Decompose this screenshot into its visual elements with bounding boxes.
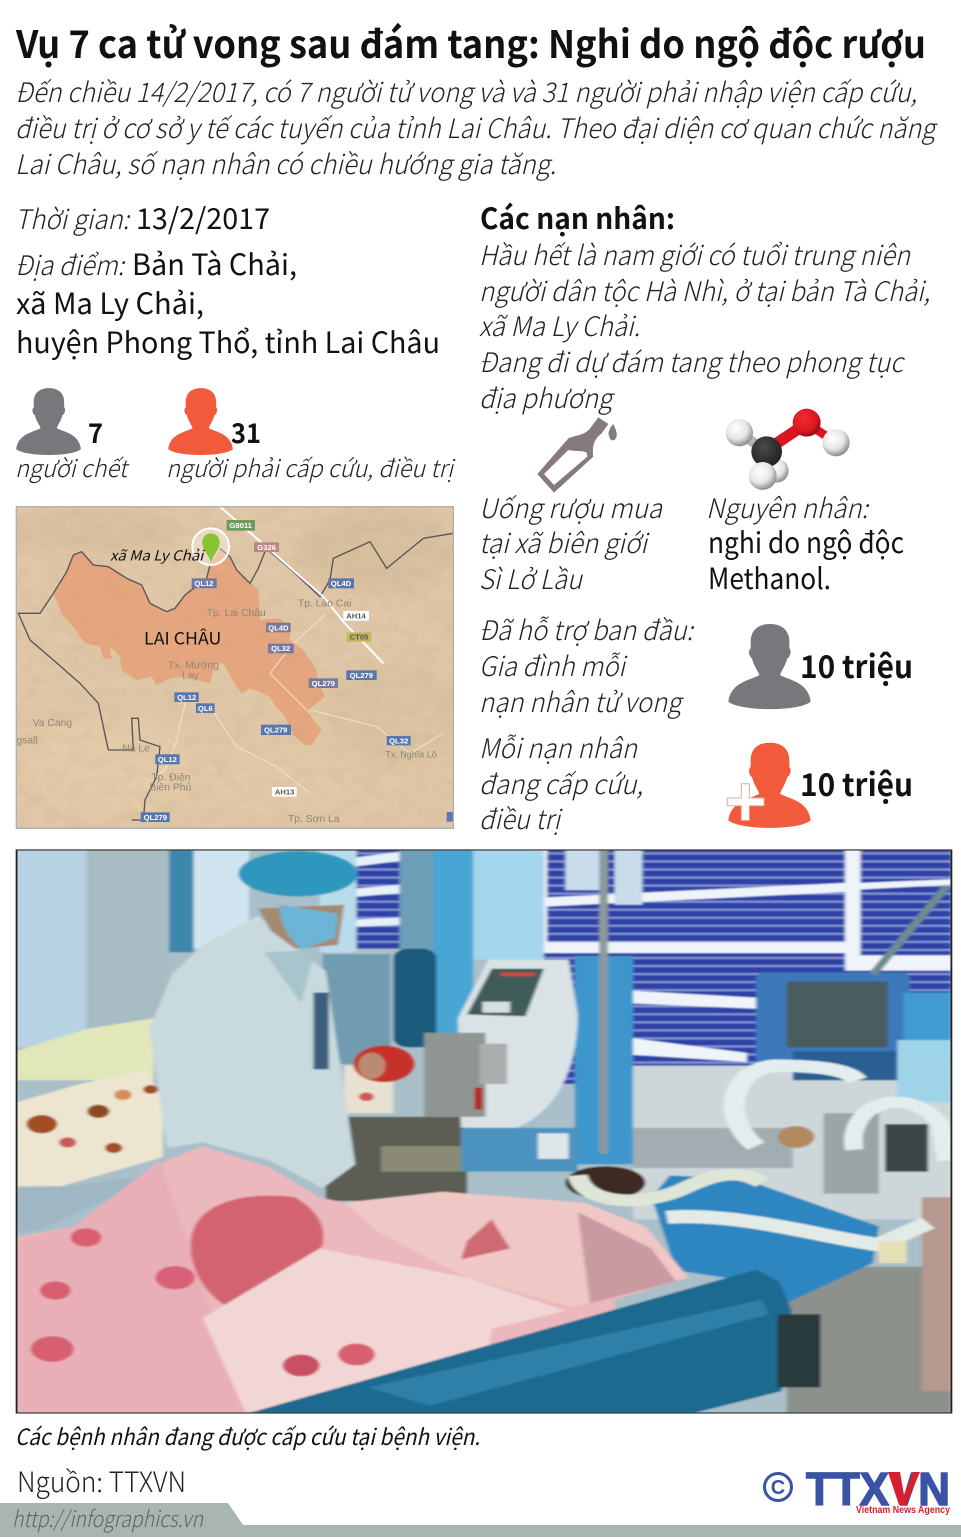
road labels: QL32 xyxy=(271,644,290,653)
road labels: AH14 xyxy=(346,612,367,621)
doctor coat xyxy=(149,916,355,1188)
amount for treated victims: 10 triệu xyxy=(800,760,913,805)
title: Vụ 7 ca tử vong sau đám tang: Nghi do ngộ độc rượu xyxy=(15,14,926,69)
footer band xyxy=(0,1503,961,1537)
road labels: QL4D xyxy=(268,623,289,632)
cause text: nghi do ngộ độc xyxy=(708,520,904,562)
time and place block: Thời gian: xyxy=(15,198,131,237)
icon: wine bottle xyxy=(537,417,617,493)
road labels: QL279 xyxy=(144,813,167,822)
TTXVN logo: TTXVN xyxy=(806,1463,950,1515)
map of Lai Chau xyxy=(10,507,460,828)
blanket xyxy=(18,1146,682,1346)
map place names: Tp. Lai Châu xyxy=(207,608,266,619)
cause text: Nguyên nhân: xyxy=(706,487,870,526)
hospitalised label: người phải cấp cứu, điều trị xyxy=(166,449,456,484)
victims text block: người dân tộc Hà Nhì, ở tại bản Tà Chải, xyxy=(479,270,930,309)
map of Lai Chau: Biên Phủ xyxy=(149,782,192,794)
commune marker xyxy=(192,528,229,565)
support for bereaved families text: Gia đình mỗi xyxy=(479,645,628,684)
road labels: QL12 xyxy=(194,579,214,588)
icon: grey person, deaths xyxy=(16,388,81,455)
icon: red person with cross xyxy=(727,743,811,828)
ventilator tube xyxy=(565,1166,645,1199)
oxygen tank and cabinet xyxy=(323,954,390,1064)
road labels: QL32 xyxy=(389,736,408,745)
TTXVN logo: C xyxy=(771,1477,785,1499)
website url: http://infographics.vn xyxy=(12,1502,204,1534)
time and place block: 13/2/2017 xyxy=(136,196,270,238)
province label: LAI CHÂU xyxy=(144,624,221,649)
photo caption: Các bệnh nhân đang được cấp cứu tại bệnh viện. xyxy=(15,1420,480,1452)
TTXVN logo: Vietnam News Agency xyxy=(856,1505,950,1516)
source: Nguồn: TTXVN xyxy=(17,1461,186,1501)
victims text block: địa phương xyxy=(479,377,615,416)
map of Lai Chau: Tx. Nghĩa Lộ xyxy=(385,749,437,759)
right hand equipment xyxy=(633,1066,951,1219)
road labels: QL12 xyxy=(158,755,177,764)
support for treated victims text: đang cấp cứu, xyxy=(479,763,643,802)
support for bereaved families text: nạn nhân tử vong xyxy=(479,681,684,720)
victims text block: Các nạn nhân: xyxy=(480,196,675,238)
alcohol purchase text: tại xã biên giới xyxy=(479,522,650,561)
alcohol purchase text xyxy=(479,487,663,597)
support for treated victims text: điều trị xyxy=(479,798,563,837)
support for bereaved families text: Đã hỗ trợ ban đầu: xyxy=(479,609,695,648)
map of Lai Chau: Tp. Lào Cai xyxy=(298,599,351,610)
bed rail xyxy=(249,1270,792,1413)
intro paragraph xyxy=(15,71,938,182)
icon: methanol molecule xyxy=(726,409,850,490)
alcohol purchase text: Sì Lở Lầu xyxy=(479,558,583,597)
intro paragraph: Đến chiều 14/2/2017, có 7 người tử vong và và 31 người phải nhập viện cấp cứu, xyxy=(15,71,917,110)
victims text block xyxy=(479,196,930,416)
victims text block: Hầu hết là nam giới có tuổi trung niên xyxy=(479,234,911,273)
cause text xyxy=(706,487,904,598)
map of Lai Chau: gsall xyxy=(16,735,38,746)
floor xyxy=(326,1117,467,1201)
road labels: G8011 xyxy=(229,521,253,530)
road labels: QL6 xyxy=(198,704,213,713)
time and place block: huyện Phong Thổ, tỉnh Lai Châu xyxy=(16,320,440,362)
curtain and wall xyxy=(18,850,87,1048)
road labels: QL4D xyxy=(331,579,352,588)
victims text block: xã Ma Ly Chải. xyxy=(479,305,640,344)
deaths label: người chết xyxy=(15,449,129,484)
road labels: QL279 xyxy=(312,679,335,688)
map of Lai Chau: Va Cang xyxy=(33,718,72,729)
alcohol purchase text: Uống rượu mua xyxy=(479,487,663,526)
road labels: G326 xyxy=(257,543,276,552)
road labels: AH13 xyxy=(275,788,294,797)
intro paragraph: Lai Châu, số nạn nhân có chiều hướng gia tăng. xyxy=(15,143,556,182)
cause text: Methanol. xyxy=(708,556,831,598)
icon: grey person, support xyxy=(728,624,811,709)
deaths count: 7 xyxy=(88,412,103,451)
amount for families: 10 triệu xyxy=(800,642,913,687)
time and place block: xã Ma Ly Chải, xyxy=(16,281,204,323)
map of Lai Chau: Tp. Điện xyxy=(151,773,191,784)
map of Lai Chau: Tx. Mường xyxy=(168,660,219,671)
support for treated victims text: Mỗi nạn nhân xyxy=(479,727,638,766)
road labels: QL279 xyxy=(264,726,287,735)
road labels: QL12 xyxy=(177,693,196,702)
commune label: xã Ma Ly Chải xyxy=(110,546,206,566)
time and place block: Địa điểm: xyxy=(15,244,126,283)
photo: doctor and patients in hospital xyxy=(17,850,951,1413)
map of Lai Chau: Na Le xyxy=(122,743,150,754)
road labels xyxy=(141,520,453,822)
left patient bedding xyxy=(17,1018,154,1080)
time and place block: Bản Tà Chải, xyxy=(132,242,297,284)
road labels: QL279 xyxy=(350,671,373,680)
support for treated victims text xyxy=(479,727,643,837)
road labels: CT05 xyxy=(350,633,369,642)
window blinds xyxy=(544,850,951,1084)
province area xyxy=(53,548,325,745)
support for bereaved families text xyxy=(479,609,695,720)
hospitalised count: 31 xyxy=(231,412,261,451)
victims text block: Đang đi dự đám tang theo phong tục xyxy=(479,341,905,380)
time and place block xyxy=(15,196,440,362)
map of Lai Chau: Tp. Sơn La xyxy=(288,814,340,825)
machine xyxy=(575,956,633,1164)
icon: red person, hospitalised xyxy=(168,388,233,455)
lower right equipment xyxy=(787,1267,951,1413)
map of Lai Chau: Lay xyxy=(182,670,199,681)
